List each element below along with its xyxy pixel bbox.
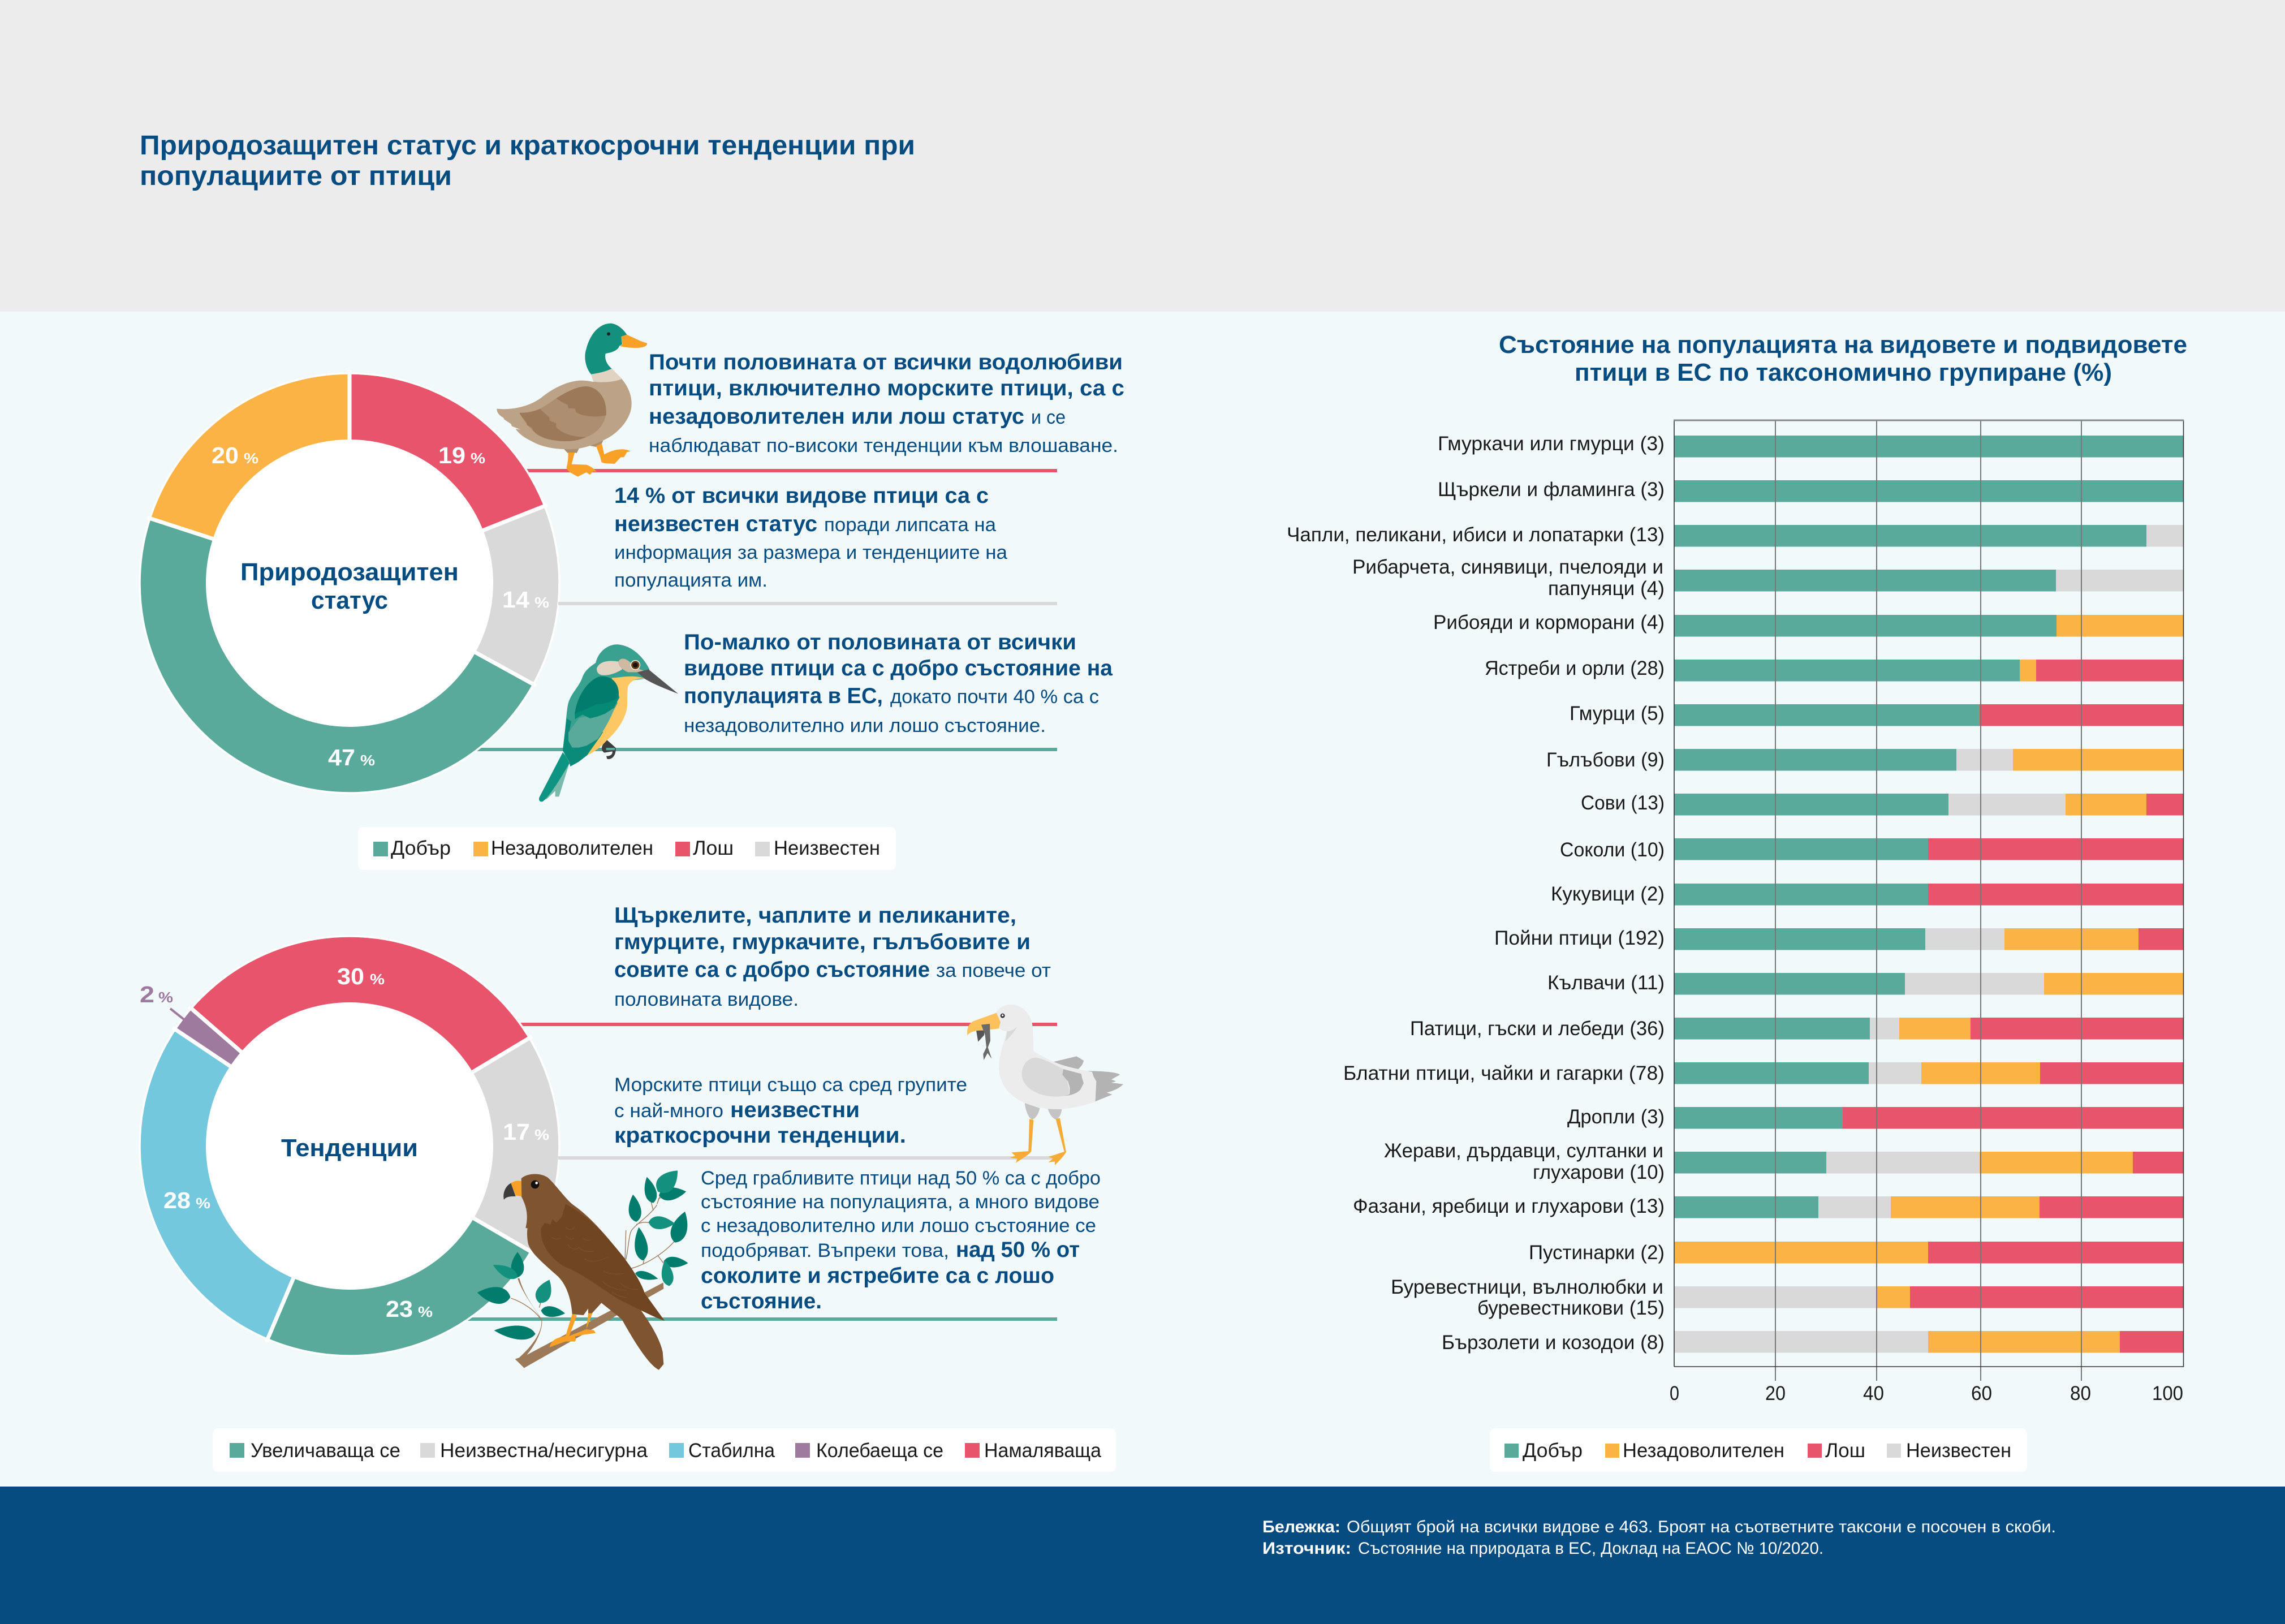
text block: unknown status: информация за размера и тенденциите на [614, 542, 1007, 563]
row: Буревестници: Буревестници, вълнолюбки и [1391, 1276, 1663, 1298]
row: Пойни птици [1494, 927, 2184, 950]
row: Соколи: Соколи (10) [1560, 839, 1665, 861]
chart title: Състояние на популацията на видовете и подвидовете [1499, 331, 2187, 359]
row: Бързолети [1442, 1331, 2184, 1354]
donut centre label: статус [311, 587, 388, 614]
label: 19 %: % [471, 450, 485, 467]
text block: good status: видове птици са с добро състояние на [684, 656, 1113, 680]
text block: good status [684, 630, 1113, 736]
label: 30 %: 30 [337, 963, 364, 989]
x axis labels: 60 [1971, 1382, 1992, 1405]
text block: good status: незадоволително или лошо състояние. [684, 715, 1046, 736]
leader line: unknown trend [554, 1156, 1057, 1160]
label: 30 % [337, 963, 385, 989]
text block: good trends: Щъркелите, чаплите и пеликаните, [614, 903, 1016, 928]
row: Рибарчета: папуняци (4) [1548, 578, 1665, 600]
row: Дропли [1567, 1106, 2184, 1129]
row: Фазани: Фазани, яребици и глухарови (13) [1353, 1195, 1665, 1217]
row: Пойни птици: Пойни птици (192) [1494, 927, 1665, 949]
leader line: decreasing trend [515, 1023, 1057, 1026]
label: 19 %: 19 [438, 442, 465, 468]
row: Жерави: Жерави, дърдавци, султанки и [1384, 1140, 1663, 1162]
text block: birds of prey: състояние на популацията, а много видове [701, 1191, 1100, 1213]
label: 20 %: 20 [212, 442, 239, 468]
label: 47 %: 47 [328, 744, 355, 770]
row: Чапли [1287, 524, 2184, 546]
label: 17 %: % [534, 1126, 549, 1143]
label: 2 % with tick: 2 [140, 981, 154, 1007]
text block: unknown status: 14 % от всички видове птици са с [614, 484, 989, 508]
text block: birds of prey: подобряват. Въпреки това, [701, 1240, 949, 1261]
row: Щъркели [1438, 479, 2184, 502]
legend: bar chart: Добър [1523, 1440, 1583, 1462]
label: 19 % [438, 442, 485, 468]
donut centre label: Тенденции [281, 1134, 418, 1162]
row: Соколи [1560, 838, 2184, 861]
text block: seabirds: неизвестни [730, 1098, 860, 1122]
x axis labels: 80 [2070, 1382, 2091, 1405]
x axis labels: 20 [1765, 1382, 1786, 1405]
footer note and source: Бележка: [1262, 1518, 1340, 1536]
row: Бързолети: Бързолети и козодои (8) [1442, 1332, 1665, 1354]
text block: seabirds [614, 1074, 967, 1148]
label: 47 % [328, 744, 375, 770]
legend: trends: Стабилна [688, 1440, 775, 1462]
text block: unknown status [614, 484, 1007, 591]
row: Блатни птици: Блатни птици, чайки и гагарки (78) [1343, 1062, 1665, 1084]
row: Ястреби [1485, 657, 2184, 681]
label: 17 % [503, 1119, 549, 1145]
row: Кълвачи [1547, 972, 2184, 994]
legend: bar chart: Лош [1825, 1440, 1865, 1462]
icon: gull with fish [967, 1005, 1123, 1165]
legend: conservation status: Неизвестен [774, 837, 880, 859]
icon: kingfisher [539, 644, 678, 802]
donut centre label [240, 558, 459, 614]
text block: unknown status: поради липсата на [824, 514, 996, 536]
leader line: poor status [524, 469, 1057, 472]
x axis labels: 0 [1670, 1382, 1679, 1405]
text block: seabirds: Морските птици също са сред групите [614, 1074, 967, 1096]
label: 14 %: % [534, 594, 549, 611]
label: 23 %: 23 [386, 1296, 413, 1322]
row: Гмуркачи [1438, 433, 2184, 457]
footer band [0, 1487, 2285, 1624]
title [140, 131, 915, 191]
row: Жерави [1384, 1140, 2184, 1183]
row: Чапли: Чапли, пеликани, ибиси и лопатарки (13) [1287, 524, 1665, 546]
leader line: unknown status [554, 602, 1057, 605]
row: Щъркели: Щъркели и фламинга (3) [1438, 479, 1665, 501]
row: Гълъбови [1546, 749, 2184, 771]
x axis labels [1670, 1382, 2183, 1405]
row: Патици [1410, 1018, 2184, 1040]
text block: good status: докато почти 40 % са с [890, 686, 1099, 708]
x axis labels: 40 [1863, 1382, 1884, 1405]
row: Пустинарки [1529, 1242, 2184, 1264]
label: 28 %: 28 [163, 1187, 191, 1213]
legend: bar chart: Незадоволителен [1623, 1440, 1784, 1462]
row: Ястреби: Ястреби и орли (28) [1485, 657, 1665, 679]
row: Кукувици: Кукувици (2) [1551, 883, 1665, 905]
legend: conservation status: Незадоволителен [491, 837, 653, 859]
text block: unknown status: популацията им. [614, 570, 768, 591]
row: Гмуркачи: Гмуркачи или гмурци (3) [1438, 433, 1665, 455]
text block: waterbirds: незадоволителен или лош статус [649, 404, 1024, 429]
donut centre label: Природозащитен [240, 558, 459, 586]
legend: bar chart [1490, 1428, 2027, 1472]
row: Рибарчета: Рибарчета, синявици, пчелояди и [1352, 556, 1663, 578]
label: 23 %: % [418, 1303, 433, 1320]
label: 28 % [163, 1187, 210, 1213]
legend: trends: Намаляваща [984, 1440, 1102, 1462]
footer note and source: Състояние на природата в ЕС, Доклад на ЕАОС № 10/2020. [1358, 1539, 1823, 1558]
label: 17 %: 17 [503, 1119, 530, 1145]
label: 2 % with tick: % [158, 989, 173, 1006]
text block: good trends: совите са с добро състояние [614, 958, 930, 982]
legend: bar chart: Неизвестен [1906, 1440, 2011, 1462]
text block: birds of prey: състояние. [701, 1289, 822, 1313]
text block: seabirds: краткосрочни тенденции. [614, 1123, 906, 1148]
footer note and source [1262, 1518, 2056, 1558]
text block: birds of prey: Сред грабливите птици над 50 % са с добро [701, 1168, 1101, 1189]
legend: trends: Неизвестна/несигурна [440, 1440, 648, 1462]
text block: birds of prey [701, 1168, 1101, 1313]
row: Кълвачи: Кълвачи (11) [1547, 972, 1665, 994]
header band [0, 0, 2285, 312]
row: Рибояди [1433, 611, 2184, 637]
label: 47 %: % [360, 752, 375, 769]
grey leader line join: unknown status [558, 602, 564, 605]
row: Блатни птици [1343, 1062, 2184, 1084]
row: Дропли: Дропли (3) [1567, 1106, 1665, 1128]
row: Буревестници [1391, 1276, 2184, 1319]
label: 23 % [386, 1296, 433, 1322]
legend: conservation status: Добър [391, 837, 451, 859]
row: Рибояди: Рибояди и корморани (4) [1433, 611, 1665, 634]
text block: waterbirds: и се [1031, 407, 1066, 428]
donut chart: trends [101, 897, 598, 1395]
text block: birds of prey: с незадоволително или лошо състояние се [701, 1215, 1096, 1237]
row: Буревестници: буревестникови (15) [1477, 1297, 1665, 1319]
title: популациите от птици [140, 161, 452, 191]
grey leader line join: unknown trend [558, 1156, 564, 1160]
row: Гмурци [1570, 703, 2184, 726]
text block: good trends: гмурците, гмуркачите, гълъбовите и [614, 930, 1031, 954]
text block: good status: популацията в ЕС, [684, 684, 883, 708]
row: Патици: Патици, гъски и лебеди (36) [1410, 1018, 1665, 1040]
row: Рибарчета [1352, 556, 2184, 600]
row: Пустинарки: Пустинарки (2) [1529, 1242, 1665, 1264]
legend: trends [213, 1428, 1116, 1472]
label: 2 % with tick [140, 981, 187, 1022]
label: 20 %: % [244, 450, 258, 467]
label: 30 %: % [370, 971, 385, 988]
stacked bar chart [1287, 420, 2184, 1405]
icon: hawk on branch [476, 1165, 692, 1370]
row: Сови: Сови (13) [1581, 792, 1665, 814]
text block: waterbirds: птици, включително морските птици, са с [649, 376, 1124, 400]
label: 20 % [212, 442, 258, 468]
row: Гмурци: Гмурци (5) [1570, 703, 1665, 725]
row: Фазани [1353, 1195, 2184, 1218]
row: Сови [1581, 792, 2184, 816]
leaves [476, 1175, 692, 1341]
chart title: птици в ЕС по таксономично групиране (%) [1575, 359, 2112, 386]
row: Кукувици [1551, 883, 2184, 905]
row: Жерави: глухарови (10) [1533, 1161, 1665, 1183]
donut chart: conservation status [110, 343, 589, 823]
label: 14 % [502, 587, 549, 613]
icon: duck [497, 324, 647, 477]
text block: waterbirds: наблюдават по-високи тенденции към влошаване. [649, 435, 1118, 456]
leader line: good status [469, 748, 1057, 751]
label: 28 %: % [196, 1195, 210, 1212]
label: 14 %: 14 [502, 587, 529, 613]
legend: trends: Увеличаваща се [251, 1440, 400, 1462]
text block: waterbirds [649, 350, 1124, 456]
footer note and source: Източник: [1262, 1539, 1351, 1558]
text block: good status: По-малко от половината от всички [684, 630, 1076, 654]
title: Природозащитен статус и краткосрочни тенденции при [140, 131, 915, 161]
text block: good trends [614, 903, 1051, 1010]
legend: trends: Колебаеща се [816, 1440, 943, 1462]
text block: seabirds: с най-много [614, 1100, 723, 1122]
text block: waterbirds: Почти половината от всички водолюбиви [649, 350, 1123, 374]
footer note and source: Общият брой на всички видове е 463. Броят на съответните таксони е посочен в скоби. [1347, 1518, 2056, 1536]
legend: conservation status: Лош [693, 837, 734, 859]
text block: unknown status: неизвестен статус [614, 512, 817, 536]
x axis labels: 100 [2152, 1382, 2183, 1405]
legend: conservation status [358, 827, 896, 870]
chart title [1499, 331, 2187, 386]
text block: good trends: за повече от [936, 960, 1051, 981]
text block: birds of prey: над 50 % от [956, 1238, 1080, 1262]
text block: good trends: половината видове. [614, 989, 799, 1010]
text block: birds of prey: соколите и ястребите са с лошо [701, 1264, 1054, 1288]
row: Гълъбови: Гълъбови (9) [1546, 749, 1665, 771]
leader line: increasing trend [461, 1317, 1057, 1321]
